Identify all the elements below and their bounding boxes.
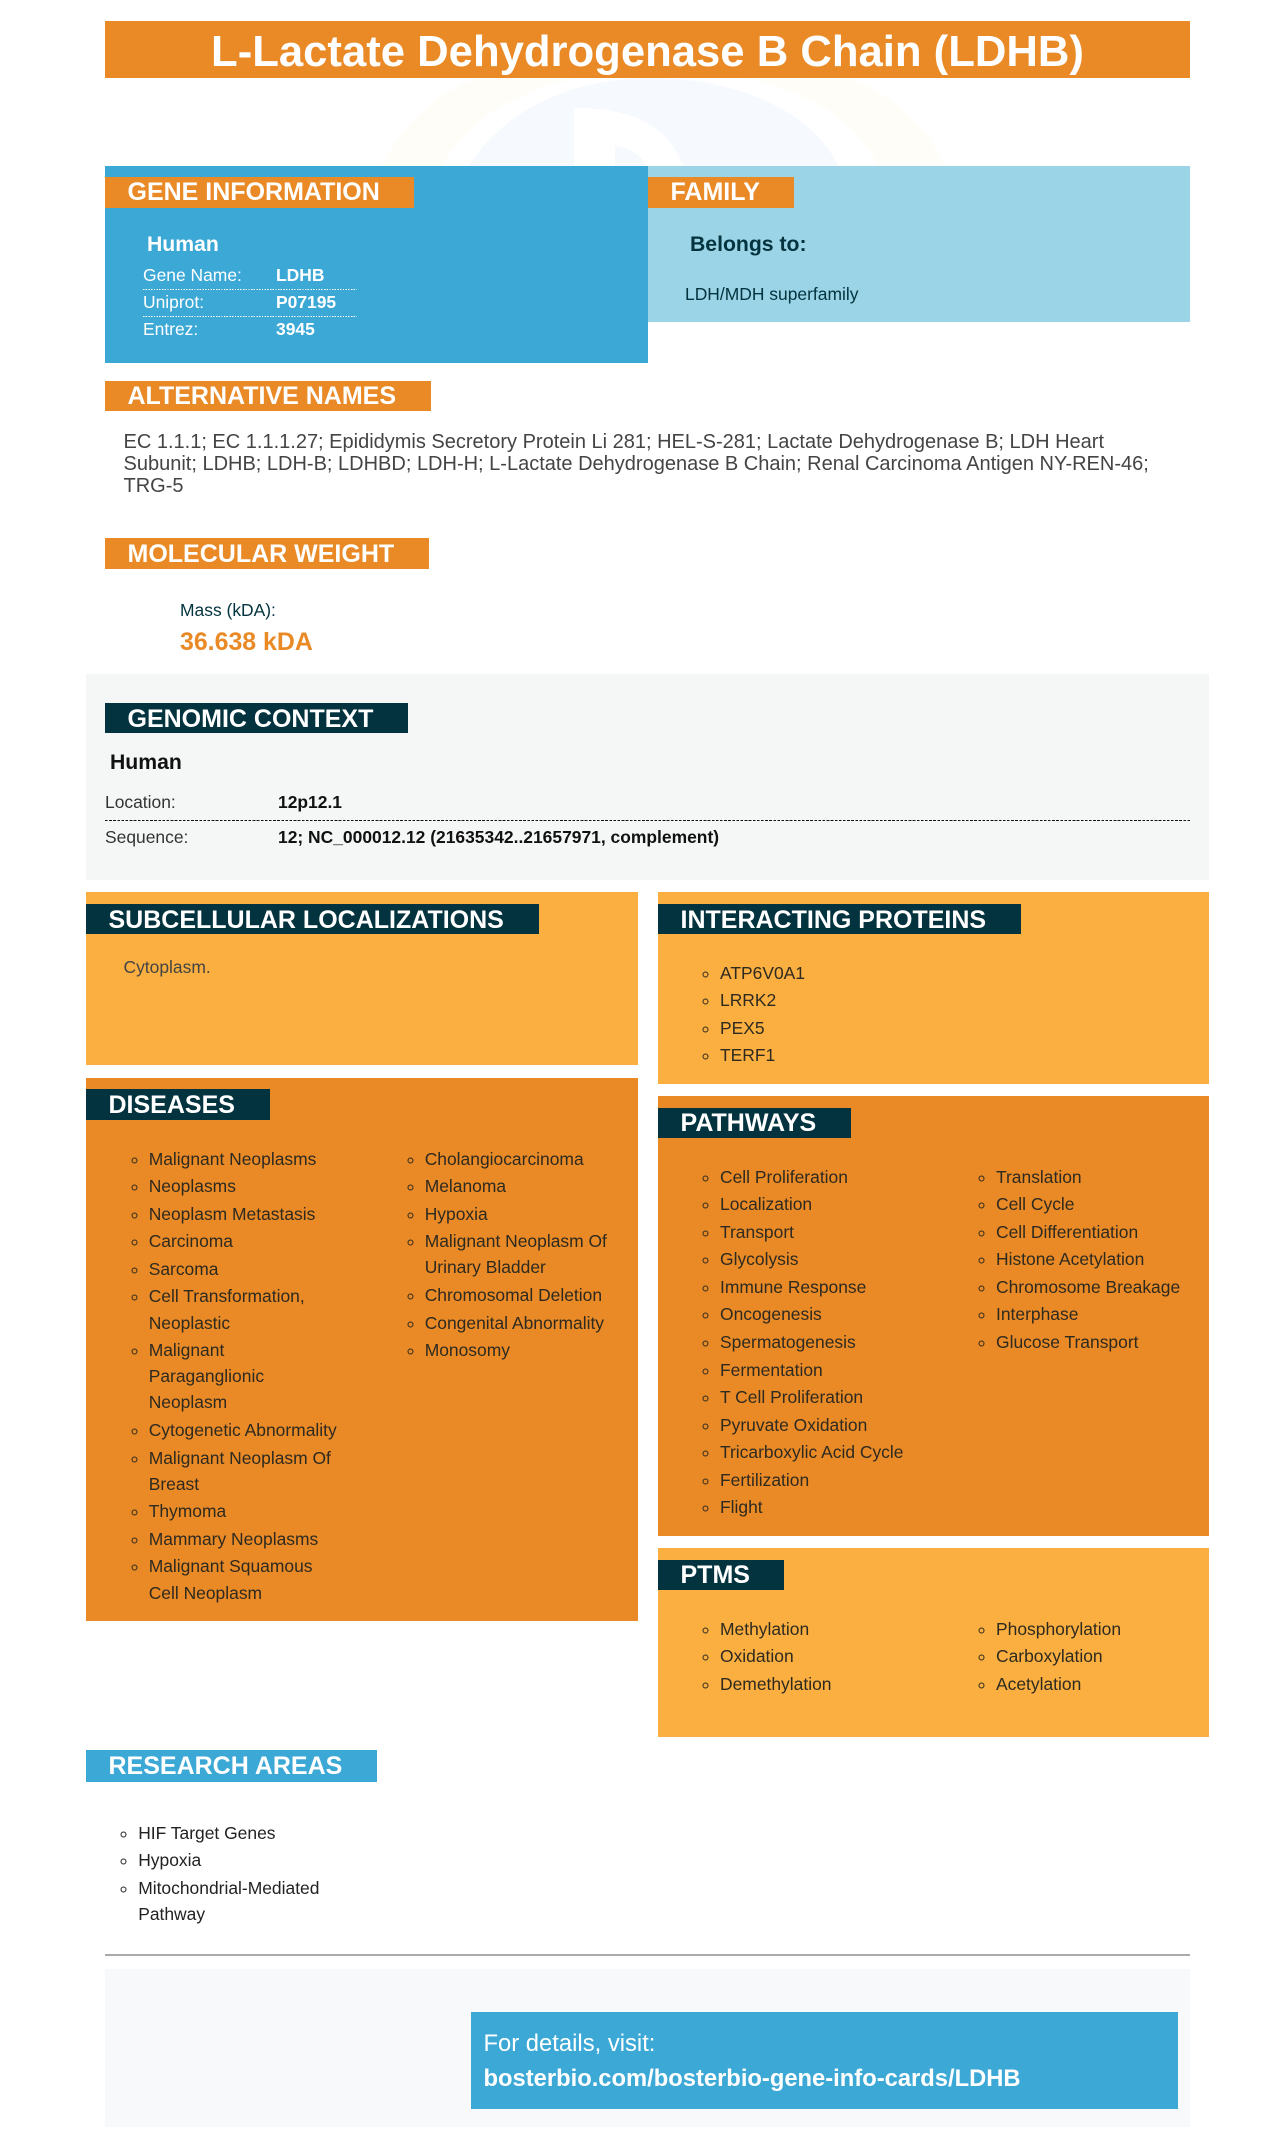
background watermark logo [469,78,838,166]
disease list column 1: Cell Neoplasm [149,1583,262,1603]
entrez row: Entrez: [143,319,198,339]
callout url: bosterbio.com/bosterbio-gene-info-cards/LDHB [484,2065,1021,2092]
disease list column 1: Malignant Squamous [149,1556,313,1576]
title banner [105,21,1190,78]
uniprot row: Uniprot: [143,292,204,312]
pathway list column 1: Fertilization [720,1470,809,1490]
panel: gene information [105,166,648,363]
pathway list column 1: Tricarboxylic Acid Cycle [720,1442,903,1462]
research area list: HIF Target Genes [138,1823,276,1843]
heading: diseases: DISEASES [108,1091,235,1119]
PTM list column 1: Demethylation [720,1674,831,1694]
localization text: Cytoplasm. [124,957,211,977]
panel: subcellular localizations [86,892,638,1065]
location row: Location: [105,792,176,812]
family value: LDH/MDH superfamily [685,284,858,304]
disease list column 2: Congenital Abnormality [425,1313,604,1333]
disease list column 1: Mammary Neoplasms [149,1529,318,1549]
research area list: Mitochondrial-Mediated [138,1878,319,1898]
disease list column 1: Malignant Neoplasms [149,1149,316,1169]
location row: 12p12.1 [278,792,342,812]
disease list column 1: Carcinoma [149,1231,233,1251]
sequence row: Sequence: [105,827,188,847]
panel: family [648,166,1190,322]
pathway list column 2: Histone Acetylation [996,1249,1144,1269]
pathway list column 2: Chromosome Breakage [996,1277,1180,1297]
disease list column 1: Neoplastic [149,1313,230,1333]
protein list [702,963,805,1065]
gene name row: Gene Name: [143,264,242,284]
protein list: LRRK2 [720,990,776,1010]
panel: interacting proteins [658,892,1209,1084]
uniprot row: P07195 [276,292,336,312]
panel: PTMs [658,1548,1209,1737]
mass value: 36.638 kDA [180,628,313,656]
pathway list column 1: Fermentation [720,1360,823,1380]
disease list column 1: Cytogenetic Abnormality [149,1420,337,1440]
disease list column 2: Melanoma [425,1176,506,1196]
heading: genomic context: GENOMIC CONTEXT [128,705,373,733]
disease list column 2: Cholangiocarcinoma [425,1149,584,1169]
heading: family [648,177,794,208]
alternative names text: EC 1.1.1; EC 1.1.1.27; Epididymis Secretory Protein Li 281; HEL-S-281; Lactate Dehydrogenase B; LDH Heart [124,431,1104,453]
PTM list column 2: Carboxylation [996,1646,1103,1666]
disease list column 2: Chromosomal Deletion [425,1285,602,1305]
pathway list column 2 [978,1167,1180,1352]
disease list column 2: Malignant Neoplasm Of [425,1231,607,1251]
pathway list column 1: Localization [720,1194,812,1214]
pathway list column 2: Interphase [996,1304,1078,1324]
disease list column 2: Monosomy [425,1340,510,1360]
PTM list column 2: Phosphorylation [996,1619,1121,1639]
heading: PTMs: PTMS [680,1561,750,1589]
gene name row [143,264,324,284]
disease list column 1: Thymoma [149,1501,226,1521]
heading: diseases [86,1089,270,1120]
PTM list column 1: Oxidation [720,1646,794,1666]
heading: alternative names: ALTERNATIVE NAMES [128,382,396,410]
heading: subcellular localizations: SUBCELLULAR LOCALIZATIONS [108,906,504,934]
callout label: For details, visit: [484,2030,655,2056]
PTM list column 2 [978,1619,1121,1694]
PTM list column 1 [702,1619,831,1694]
panel: diseases [86,1078,638,1621]
heading: pathways [658,1108,851,1138]
pathway list column 1 [702,1167,903,1517]
protein list: TERF1 [720,1045,775,1065]
gene name row: LDHB [276,264,324,284]
disease list column 1: Neoplasm Metastasis [149,1204,315,1224]
pathway list column 2: Translation [996,1167,1082,1187]
disease list column 1: Malignant [149,1340,224,1360]
heading: family: FAMILY [670,178,760,206]
protein list: PEX5 [720,1018,765,1038]
alternative names text: TRG-5 [124,475,184,497]
disease list column 1: Cell Transformation, [149,1286,305,1306]
panel: genomic context [86,674,1209,880]
disease list column 1: Neoplasm [149,1392,227,1412]
section: molecular weight [105,538,429,656]
heading: PTMs [658,1560,784,1590]
pathway list column 1: Transport [720,1222,794,1242]
pathway list column 1: Pyruvate Oxidation [720,1415,867,1435]
pathway list column 1: Glycolysis [720,1249,798,1269]
PTM list column 1: Methylation [720,1619,809,1639]
pathway list column 2: Cell Cycle [996,1194,1074,1214]
disease list column 2: Urinary Bladder [425,1257,546,1277]
heading: molecular weight: MOLECULAR WEIGHT [128,540,394,568]
research area list: Pathway [138,1904,205,1924]
species label: Human [147,232,219,256]
belongs to label: Belongs to: [690,232,807,256]
pathway list column 1: Immune Response [720,1277,866,1297]
location row [105,792,342,812]
panel: pathways [658,1096,1209,1536]
mass label: Mass (kDA): [180,600,276,620]
uniprot row [143,292,336,312]
title banner: L-Lactate Dehydrogenase B Chain (LDHB) [211,27,1084,76]
PTM list column 2: Acetylation [996,1674,1081,1694]
protein list: ATP6V0A1 [720,963,805,983]
disease list column 1: Breast [149,1474,199,1494]
heading: gene information: GENE INFORMATION [128,178,380,206]
entrez row: 3945 [276,319,315,339]
disease list column 2 [408,1149,607,1360]
pathway list column 2: Cell Differentiation [996,1222,1138,1242]
section: alternative names [105,381,1149,497]
alternative names text [124,431,1149,497]
footer panel [105,1969,1190,2127]
disease list column 1 [132,1149,337,1603]
pathway list column 1: T Cell Proliferation [720,1387,863,1407]
pathway list column 1: Oncogenesis [720,1304,822,1324]
heading: interacting proteins: INTERACTING PROTEINS [680,906,986,934]
pathway list column 1: Cell Proliferation [720,1167,848,1187]
alternative names text: Subunit; LDHB; LDH-B; LDHBD; LDH-H; L-Lactate Dehydrogenase B Chain; Renal Carcinoma Antigen NY-REN-46; [124,453,1149,475]
heading: pathways: PATHWAYS [680,1109,816,1137]
entrez row [143,319,315,339]
species label: Human [110,751,182,774]
research area list [120,1823,319,1924]
pathway list column 2: Glucose Transport [996,1332,1138,1352]
sequence row: 12; NC_000012.12 (21635342..21657971, complement) [278,827,719,847]
disease list column 1: Neoplasms [149,1176,236,1196]
disease list column 1: Paraganglionic [149,1366,264,1386]
disease list column 2: Hypoxia [425,1204,488,1224]
section: research areas [86,1750,377,1924]
research area list: Hypoxia [138,1850,201,1870]
heading: research areas: RESEARCH AREAS [108,1752,342,1780]
disease list column 1: Sarcoma [149,1259,218,1279]
pathway list column 1: Spermatogenesis [720,1332,856,1352]
disease list column 1: Malignant Neoplasm Of [149,1448,331,1468]
pathway list column 1: Flight [720,1497,763,1517]
callout: details link [471,2012,1178,2109]
